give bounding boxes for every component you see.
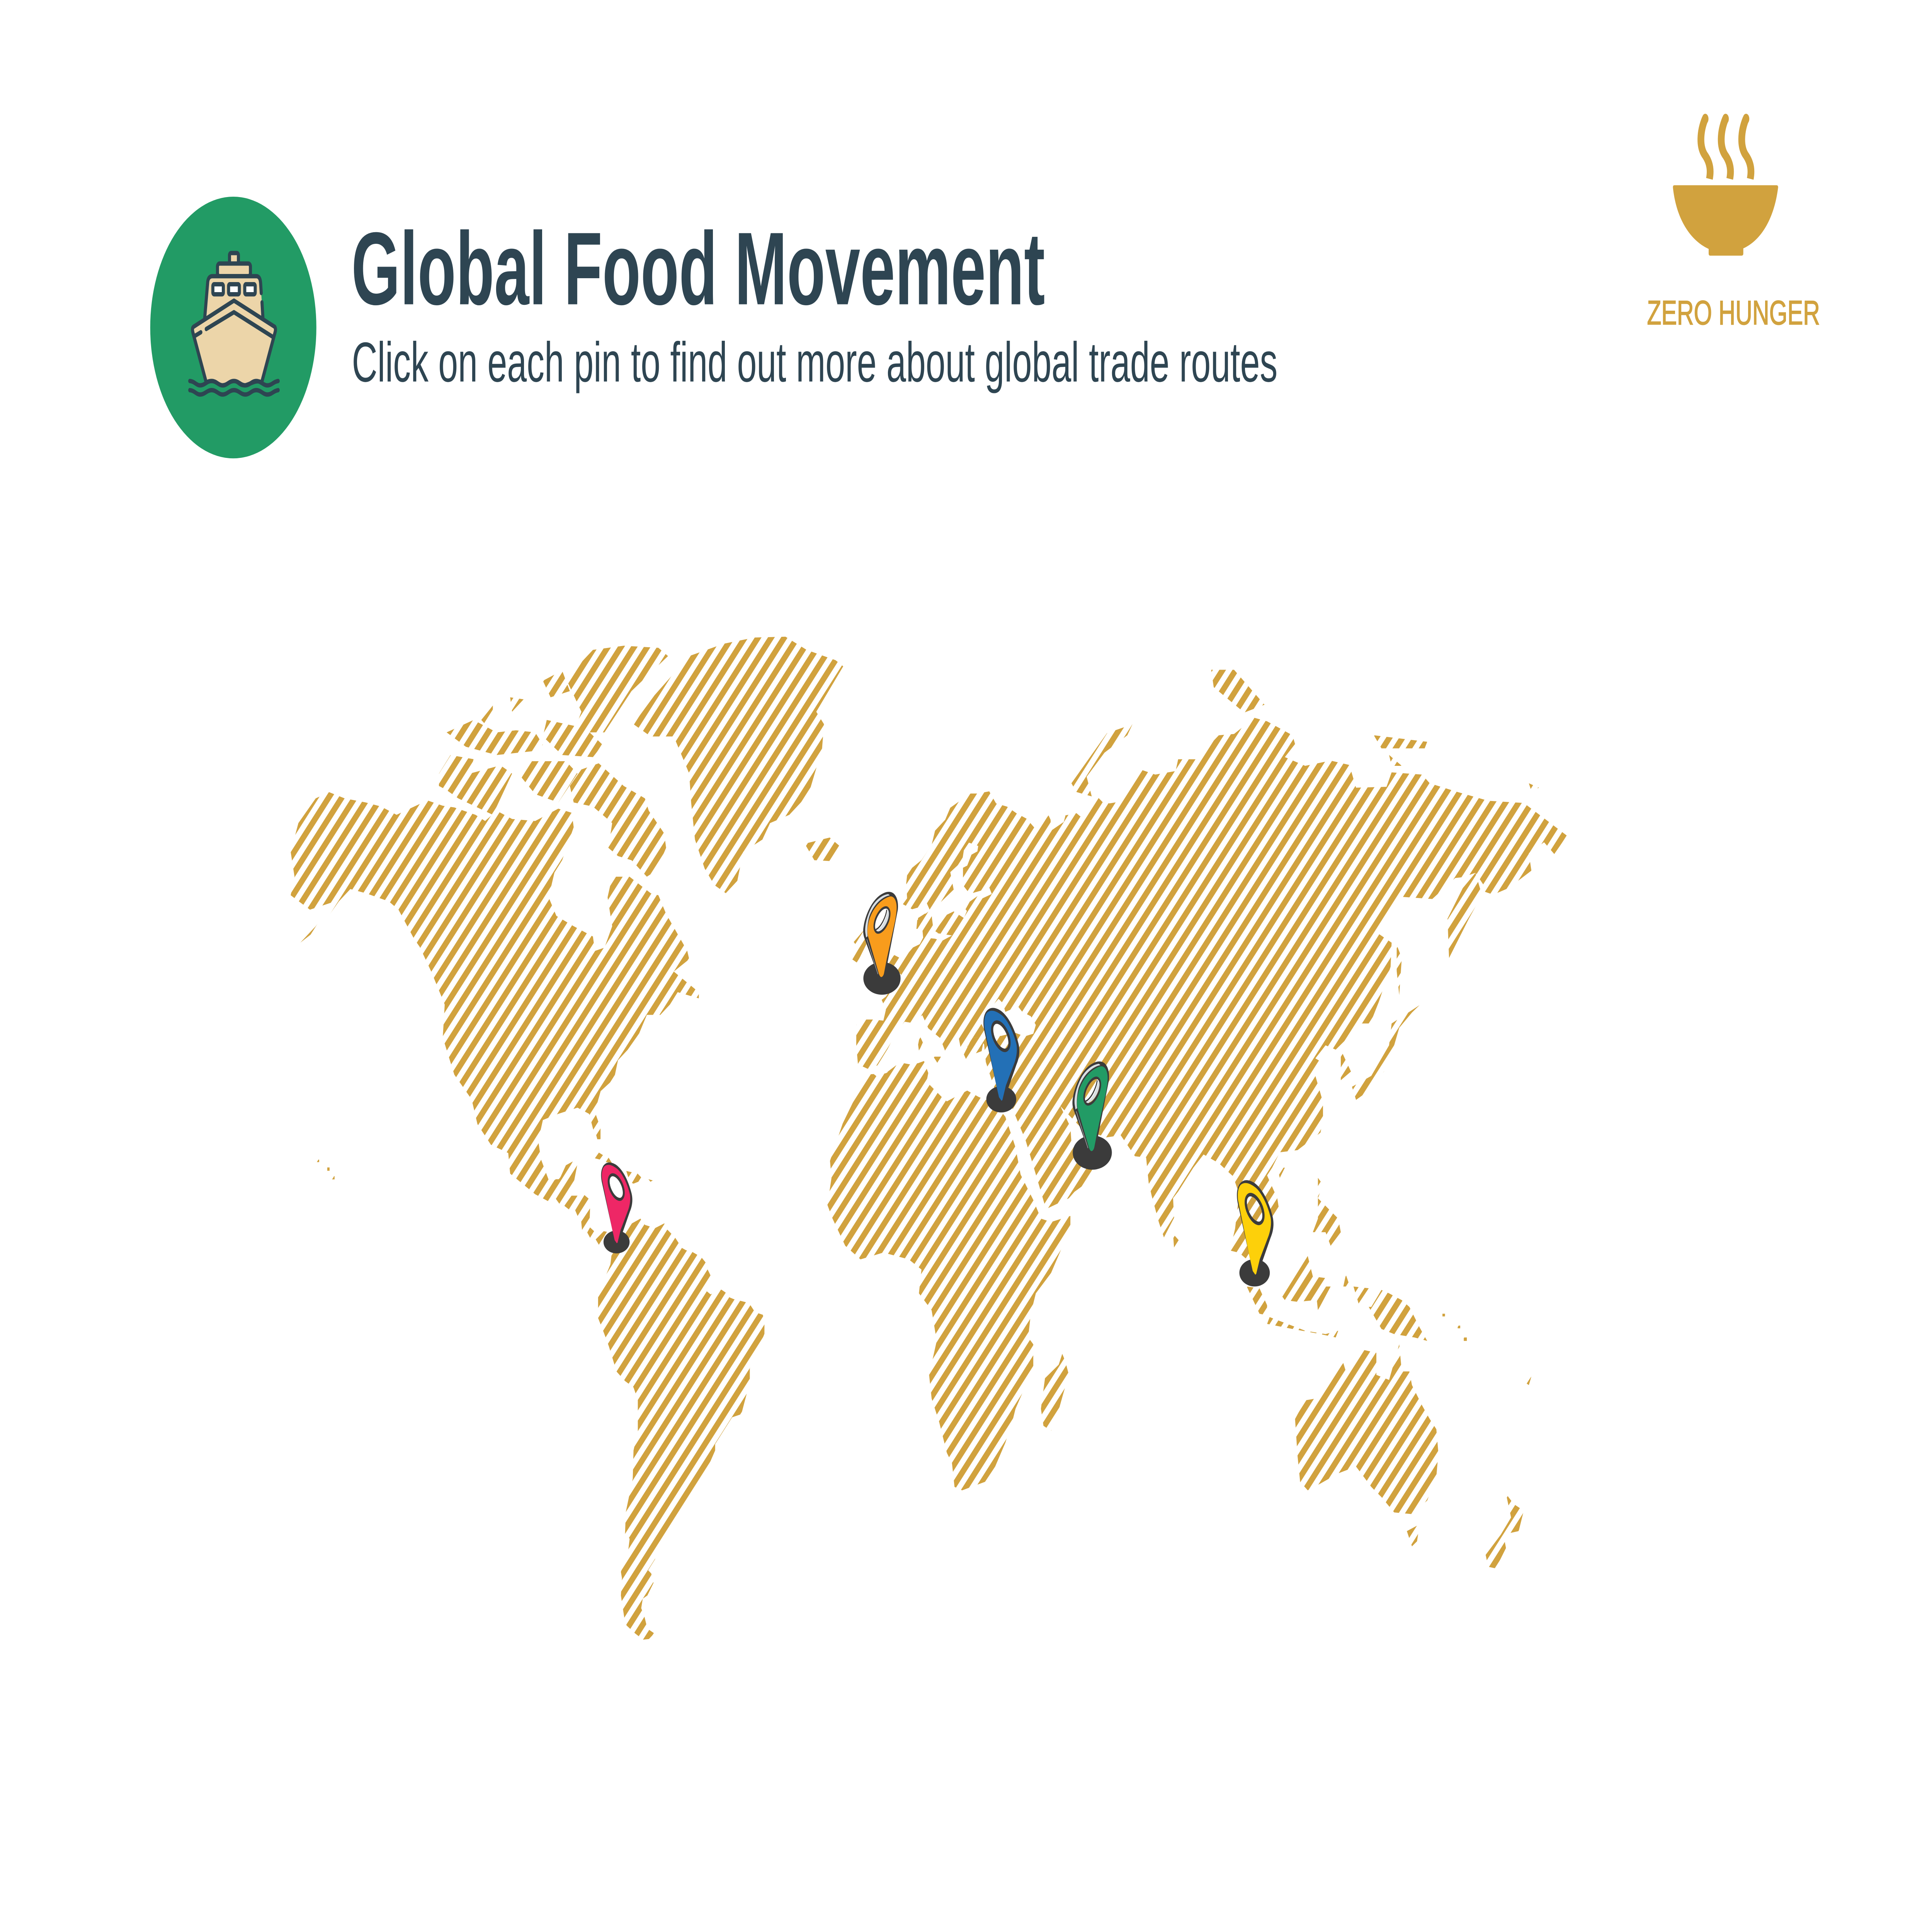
logo text: ZERO HUNGER <box>1647 294 1820 332</box>
pin: yellow <box>1237 1180 1274 1286</box>
title: Global Food Movement <box>351 211 1045 327</box>
ship <box>190 253 278 395</box>
icon: ship in green circle <box>150 197 316 458</box>
subtitle: Click on each pin to find out more about global trade routes <box>352 331 1277 393</box>
pin: orange <box>863 892 901 995</box>
icon: steaming bowl <box>1673 114 1778 256</box>
logo: zero hunger <box>1647 114 1820 332</box>
icon background circle <box>150 197 316 458</box>
pin: pink <box>601 1162 633 1253</box>
pin: blue <box>983 1008 1019 1112</box>
pin: green <box>1072 1061 1112 1170</box>
world map <box>291 637 1567 1640</box>
